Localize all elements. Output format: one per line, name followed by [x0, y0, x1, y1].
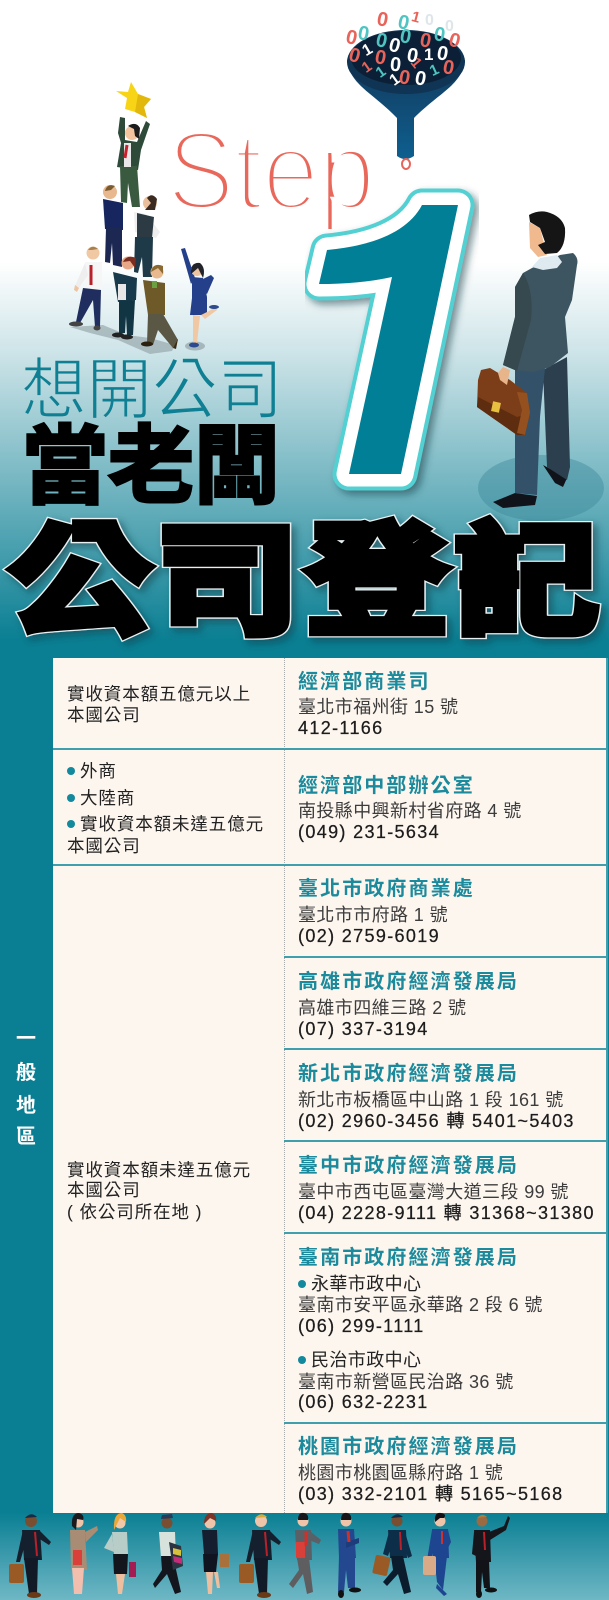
person 9 — [372, 1514, 412, 1594]
hero illustration and titles — [2, 8, 608, 651]
person 11 — [472, 1515, 510, 1598]
merged row criteria: 實收資本額未達五億元 — [67, 1160, 251, 1180]
title: company registration: 公 — [8, 514, 152, 651]
row 1 criteria: 實收資本額五億元以上 — [67, 684, 251, 704]
icon: funnel with binary digits: 1 — [373, 63, 389, 81]
merged row criteria: 本國公司 — [67, 1180, 141, 1200]
Tainan Yonghua centre: 永華市政中心 — [311, 1274, 421, 1294]
person 6 — [239, 1514, 281, 1598]
hair — [529, 211, 565, 254]
icon: funnel with binary digits — [344, 8, 465, 169]
icon: funnel with binary digits: 1 — [427, 61, 442, 80]
icon: funnel with binary digits: 0 — [413, 67, 428, 91]
icon: funnel with binary digits: 0 — [446, 29, 463, 53]
icon: funnel with binary digits: 1 — [387, 70, 404, 89]
vest man — [134, 195, 160, 277]
icon: funnel with binary digits: 1 — [360, 41, 376, 60]
side label: general areas: 區 — [16, 1126, 36, 1148]
Taipei phone: (02) 2759-6019 — [298, 926, 440, 946]
side label: general areas — [16, 1028, 36, 1148]
title: want to open a company: 想開公司 — [21, 353, 283, 428]
title: company registration: 公 — [8, 514, 152, 651]
Tainan Yonghua phone: (06) 299-1111 — [298, 1316, 425, 1336]
side label: general areas: 一 — [16, 1028, 36, 1050]
panel: registration offices table — [53, 658, 608, 1513]
person 2 — [70, 1513, 98, 1594]
row 2 office name: 經濟部中部辦公室 — [298, 775, 475, 797]
row 2 criteria: 大陸商 — [80, 788, 135, 808]
title: be the boss: 當老闆 — [22, 419, 280, 515]
illustration: team of people reaching for star — [69, 82, 219, 354]
Taoyuan phone: (03) 332-2101 轉 5165~5168 — [298, 1484, 563, 1504]
collar — [532, 255, 562, 270]
person 3 — [104, 1513, 136, 1594]
row 1 phone: 412-1166 — [298, 718, 384, 738]
big number one — [319, 205, 458, 474]
briefcase — [477, 367, 530, 435]
icon: funnel with binary digits: 1 — [410, 8, 422, 27]
row 2 address: 南投縣中興新村省府路 4 號 — [298, 801, 522, 821]
jacket — [503, 253, 578, 372]
Kaohsiung address: 高雄市四維三路 2 號 — [298, 998, 466, 1018]
side label: general areas: 般 — [16, 1062, 36, 1084]
icon: funnel with binary digits: 0 — [432, 23, 447, 47]
olive man — [141, 265, 178, 349]
merged row criteria — [67, 1160, 251, 1222]
icon: funnel with binary digits: 0 — [418, 29, 433, 53]
title: company registration: 登 — [305, 514, 449, 651]
person 7 — [289, 1513, 321, 1594]
icon: funnel with binary digits: 0 — [346, 44, 363, 68]
icon: funnel with binary digits: 1 — [424, 45, 433, 64]
woman — [181, 248, 219, 348]
row 2 criteria: 外商 — [80, 761, 117, 781]
title: company registration — [8, 514, 599, 651]
row 2 criteria: 實收資本額未達五億元 — [80, 814, 264, 834]
back leg and shoe — [543, 465, 567, 487]
icon: funnel with binary digits: 0 — [441, 56, 456, 80]
icon: funnel with binary digits: 0 — [398, 25, 413, 49]
illustration: row of business people — [9, 1512, 510, 1598]
top man — [117, 117, 150, 207]
Tainan Yonghua address: 臺南市安平區永華路 2 段 6 號 — [298, 1295, 543, 1315]
icon: funnel with binary digits: 0 — [386, 34, 403, 58]
icon: funnel with binary digits: 0 — [397, 66, 412, 90]
Tainan Minzhi phone: (06) 632-2231 — [298, 1392, 429, 1412]
row 2 criteria: 本國公司 — [67, 836, 141, 856]
icon: funnel with binary digits: 0 — [405, 44, 420, 68]
Taoyuan address: 桃園市桃園區縣府路 1 號 — [298, 1463, 503, 1483]
Taipei office name: 臺北市政府商業處 — [298, 878, 475, 900]
icon: funnel with binary digits: 0 — [389, 54, 402, 76]
panel: registration offices table: 本國公司 — [67, 705, 141, 725]
New Taipei phone: (02) 2960-3456 轉 5401~5403 — [298, 1111, 575, 1131]
New Taipei office name: 新北市政府經濟發展局 — [298, 1063, 519, 1085]
person 10 — [423, 1513, 451, 1596]
row 2 criteria — [67, 761, 264, 856]
Taichung office name: 臺中市政府經濟發展局 — [298, 1155, 519, 1177]
icon: yellow star — [116, 82, 151, 118]
icon: funnel with binary digits: 0 — [356, 22, 371, 46]
Tainan Minzhi address: 臺南市新營區民治路 36 號 — [298, 1372, 514, 1392]
Taichung phone: (04) 2228-9111 轉 31368~31380 — [298, 1203, 595, 1223]
title: company registration: 登 — [305, 514, 449, 651]
Tainan Minzhi centre: 民治市政中心 — [311, 1350, 421, 1370]
icon: funnel with binary digits: 0 — [344, 26, 359, 50]
icon: funnel with binary digits: 1 — [407, 54, 425, 72]
Kaohsiung phone: (07) 337-3194 — [298, 1019, 429, 1039]
icon: funnel with binary digits: 0 — [374, 29, 389, 53]
step label: Step — [167, 109, 375, 233]
icon: funnel with binary digits: 0 — [435, 42, 450, 66]
Taipei address: 臺北市市府路 1 號 — [298, 905, 448, 925]
title: company registration: 司 — [155, 514, 299, 651]
title: company registration: 司 — [155, 514, 299, 651]
Taoyuan office name: 桃園市政府經濟發展局 — [298, 1436, 519, 1458]
front leg and shoe — [493, 493, 537, 508]
person 4 — [153, 1514, 183, 1594]
person 5 — [202, 1513, 229, 1594]
navy man — [103, 185, 123, 267]
icon: funnel with binary digits: 0 — [375, 8, 390, 32]
icon: funnel with binary digits: 1 — [359, 58, 375, 76]
merged row criteria: ( 依公司所在地 ) — [67, 1202, 202, 1222]
icon: funnel with binary digits: 0 — [445, 18, 454, 35]
icon: funnel with binary digits: 0 — [425, 12, 434, 29]
title: company registration: 記 — [455, 514, 599, 651]
illustration: businessman with briefcase — [477, 211, 604, 521]
dark teal man — [112, 256, 137, 340]
person 8 — [338, 1513, 361, 1598]
white shirt man — [69, 246, 102, 330]
row 1 office name: 經濟部商業司 — [298, 671, 431, 693]
New Taipei address: 新北市板橋區中山路 1 段 161 號 — [298, 1090, 564, 1110]
face — [529, 222, 547, 257]
row 1 address: 臺北市福州街 15 號 — [298, 697, 458, 717]
Kaohsiung office name: 高雄市政府經濟發展局 — [298, 971, 519, 993]
side label: general areas: 地 — [16, 1095, 36, 1117]
icon: funnel with binary digits: 0 — [396, 11, 411, 35]
person 1 — [9, 1514, 51, 1598]
Tainan office name: 臺南市政府經濟發展局 — [298, 1247, 519, 1269]
icon: funnel with binary digits: 0 — [373, 46, 388, 70]
Taichung address: 臺中市西屯區臺灣大道三段 99 號 — [298, 1182, 569, 1202]
row 2 phone: (049) 231-5634 — [298, 822, 440, 842]
title: company registration: 記 — [455, 514, 599, 651]
